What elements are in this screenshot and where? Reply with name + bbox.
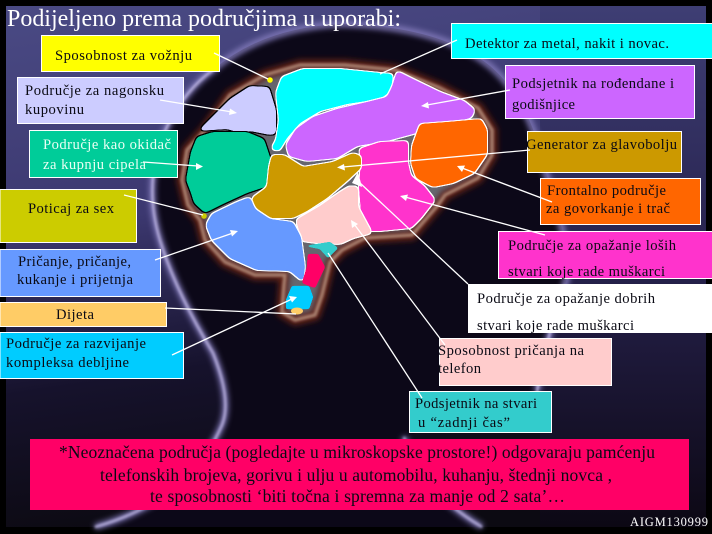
footnote panel: telefonskih brojeva, gorivu i ulju u automobilu, kuhanju, štednji novca ,: [100, 465, 612, 485]
label: shoe shopping trigger: Područje kao okidač: [43, 137, 172, 153]
arrow: headache generator: [337, 150, 530, 170]
label: bad things men do: Područje za opažanje loših: [508, 238, 677, 254]
label: diet: [0, 302, 166, 326]
region: frontal gossip: [411, 119, 487, 187]
label: frontal gossip: za govorkanje i trač: [546, 201, 671, 217]
label: last minute reminder: u “zadnji čas”: [418, 415, 510, 431]
region: red lobe: [302, 254, 325, 288]
label: sex drive: Poticaj za sex: [28, 201, 115, 217]
arrow: birthday reminder: [421, 90, 510, 108]
region: last minute reminder: [305, 242, 338, 258]
region: sex drive dot: [201, 213, 207, 219]
label: shoe shopping trigger: [30, 130, 178, 178]
label: shoe shopping trigger: za kupnju cipela: [43, 157, 147, 173]
region: weight complex: [286, 286, 313, 309]
region: driving ability dot: [267, 77, 273, 83]
leader lines and arrows: [124, 40, 552, 398]
label: headache generator: [526, 132, 682, 172]
label: weight complex: kompleksa debljine: [6, 355, 129, 371]
brain outline halo: [182, 65, 492, 320]
region: bad things men do: [359, 141, 435, 231]
label: impulse shopping: [18, 78, 184, 124]
label: metal detector: [452, 24, 712, 58]
arrow: last minute reminder: [328, 253, 422, 398]
arrow: impulse shopping: [160, 100, 237, 115]
arrow: telephone talking: [351, 220, 445, 345]
label: impulse shopping: kupovinu: [25, 102, 85, 118]
title: Podijeljeno prema područjima u uporabi:: [7, 6, 401, 32]
arrow: weight complex: [172, 296, 297, 355]
region: birthday reminder: [286, 71, 475, 161]
label: telephone talking: [438, 338, 612, 386]
label: sex drive: [0, 190, 136, 242]
label: good things men do: stvari koje rade muškarci: [477, 318, 634, 334]
label: birthday reminder: Podsjetnik na rođendane i: [512, 76, 674, 92]
region: headache generator: [252, 153, 361, 218]
label: bad things men do: [498, 232, 712, 280]
label: diet: Dijeta: [56, 307, 95, 323]
label: birthday reminder: godišnjice: [512, 97, 575, 113]
region: shoe shopping trigger: [186, 132, 271, 213]
region: telephone talking: [296, 186, 372, 244]
label: driving ability: Sposobnost za vožnju: [55, 48, 193, 64]
region: impulse shopping: [198, 86, 276, 135]
label: telephone talking: telefon: [438, 361, 482, 377]
credit: AIGM130999: [630, 515, 708, 529]
footnote panel: *Neoznačena područja (pogledajte u mikroskopske prostore!) odgovaraju pamćenju: [59, 442, 655, 462]
label: impulse shopping: Područje za nagonsku: [25, 83, 165, 99]
footnote panel: [30, 439, 689, 510]
arrow: diet: [165, 308, 296, 314]
label: talking and nagging: kukanje i prijetnja: [17, 272, 134, 288]
label: frontal gossip: Frontalno područje: [547, 183, 666, 199]
label: last minute reminder: Podsjetnik na stvari: [415, 396, 537, 412]
region: talking and nagging: [206, 197, 305, 282]
arrow: sex drive: [124, 195, 203, 215]
label: weight complex: [0, 332, 184, 378]
label: metal detector: Detektor za metal, nakit i novac.: [465, 36, 669, 52]
label: good things men do: Područje za opažanje dobrih: [477, 291, 656, 307]
region: diet: [291, 308, 303, 314]
arrow: metal detector: [380, 40, 457, 74]
arrow: bad things: [400, 194, 545, 235]
footnote panel: te sposobnosti ‘biti točna i spremna za manje od 2 sata’…: [150, 486, 565, 506]
label: weight complex: Područje za razvijanje: [6, 336, 146, 352]
brain regions: [186, 69, 487, 314]
arrow: frontal gossip: [457, 166, 552, 202]
label: headache generator: Generator za glavobolju: [526, 137, 678, 153]
label: last minute reminder: [410, 392, 552, 432]
label: birthday reminder: [506, 66, 694, 118]
label: talking and nagging: Pričanje, pričanje,: [18, 254, 131, 270]
label: talking and nagging: [0, 250, 160, 296]
label: telephone talking: Sposobnost pričanja na: [438, 343, 585, 359]
arrow: good things: [360, 183, 468, 284]
label: driving ability: [42, 36, 220, 72]
label: bad things men do: stvari koje rade muškarci: [508, 264, 665, 280]
label: good things men do: [468, 284, 712, 334]
region: good things men do: [352, 172, 362, 187]
region: metal detector: [271, 69, 393, 151]
label: frontal gossip: [540, 178, 700, 224]
arrow: shoe shopping: [143, 162, 203, 170]
arrow: driving ability: [214, 53, 268, 79]
arrow: talking: [155, 230, 238, 260]
